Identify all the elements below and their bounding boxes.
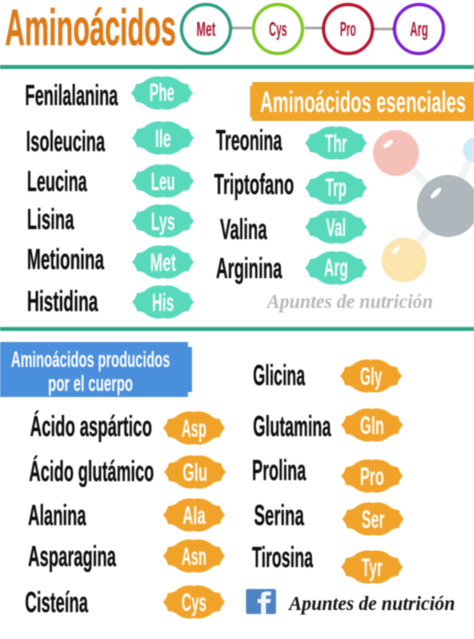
row: Treonina Thr: Treonina <box>216 125 282 157</box>
banner: Aminoácidos producidos por el cuerpo <box>0 342 192 397</box>
row: Valina Val: Valina <box>220 214 267 246</box>
row: Ácido aspártico Asp: Asp <box>182 415 206 443</box>
row: Asparagina Asn: Asparagina <box>28 541 116 573</box>
row: Alanina Ala: Alanina <box>28 500 86 532</box>
row: Glicina Gly <box>253 359 402 393</box>
row: Cisteína Cys: Cys <box>182 589 206 617</box>
row: Isoleucina Ile: Ile <box>155 125 171 153</box>
icon: facebook <box>246 589 276 614</box>
row: Alanina Ala <box>28 498 225 532</box>
row: Tirosina Tyr <box>252 542 403 584</box>
chain node: Cys <box>254 4 302 54</box>
row: Asparagina Asn: Asn <box>182 543 206 571</box>
row: Serina Ser <box>254 500 404 536</box>
row: Metionina Met: Met <box>150 249 176 277</box>
row: Prolina Pro: Prolina <box>252 455 306 487</box>
row: Ácido glutámico Glu: Ácido glutámico <box>29 454 154 488</box>
row: Leucina Leu: Leu <box>151 168 175 196</box>
row: Cisteína Cys <box>25 585 225 619</box>
row: Lisina Lys <box>27 204 194 238</box>
chain node: Met <box>182 4 230 54</box>
row: Lisina Lys: Lisina <box>27 204 74 236</box>
row: Histidina His: His <box>152 289 174 317</box>
row: Lisina Lys: Lys <box>151 208 175 236</box>
row: Glutamina Gln: Glutamina <box>253 411 331 443</box>
row: Arginina Arg: Arginina <box>216 253 282 285</box>
row: Valina Val: Val <box>326 214 346 242</box>
row: Glicina Gly: Glicina <box>253 360 305 392</box>
row: Alanina Ala: Ala <box>182 502 206 530</box>
row: Triptofano Trp: Trp <box>326 174 346 202</box>
chain node: Arg <box>394 4 444 54</box>
banner: Aminoácidos producidos por el cuerpo: Aminoácidos producidos <box>11 347 170 372</box>
row: Leucina Leu <box>27 164 194 198</box>
footer credit: Apuntes de nutrición <box>287 593 455 615</box>
row: Serina Ser: Ser <box>362 506 385 534</box>
row: Isoleucina Ile: Isoleucina <box>26 126 105 158</box>
row: Fenilalanina Phe: Fenilalanina <box>25 80 118 112</box>
title: Aminoácidos <box>5 0 176 56</box>
row: Tirosina Tyr: Tirosina <box>252 542 313 574</box>
row: Tirosina Tyr: Tyr <box>362 554 383 582</box>
row: Valina Val <box>220 210 367 246</box>
amino acid chain <box>182 4 444 54</box>
row: Triptofano Trp: Triptofano <box>214 169 294 201</box>
row: Treonina Thr: Thr <box>325 130 347 158</box>
chain node: Pro <box>324 4 372 54</box>
row: Fenilalanina Phe: Phe <box>150 79 175 107</box>
chain node: Cys: Cys <box>269 19 287 41</box>
row: Prolina Pro: Pro <box>360 463 384 491</box>
chain node: Arg: Arg <box>410 19 428 41</box>
row: Serina Ser: Serina <box>254 500 304 532</box>
row: Glutamina Gln: Gln <box>360 412 384 440</box>
row: Arginina Arg: Arg <box>324 254 348 282</box>
row: Metionina Met: Metionina <box>27 244 104 276</box>
row: Glicina Gly: Gly <box>360 363 382 391</box>
row: Leucina Leu: Leucina <box>27 166 87 198</box>
row: Ácido aspártico Asp: Ácido aspártico <box>30 409 152 443</box>
banner: Aminoácidos producidos por el cuerpo: por el cuerpo <box>48 371 133 396</box>
chain node: Pro: Pro <box>340 19 356 41</box>
row: Prolina Pro <box>252 455 403 493</box>
chain node: Met: Met <box>196 19 216 41</box>
molecule illustration <box>373 130 474 282</box>
watermark: Apuntes de nutrición <box>265 291 433 313</box>
row: Histidina His: Histidina <box>27 286 98 318</box>
row: Ácido glutámico Glu: Glu <box>182 459 208 487</box>
row: Cisteína Cys: Cisteína <box>25 587 88 619</box>
